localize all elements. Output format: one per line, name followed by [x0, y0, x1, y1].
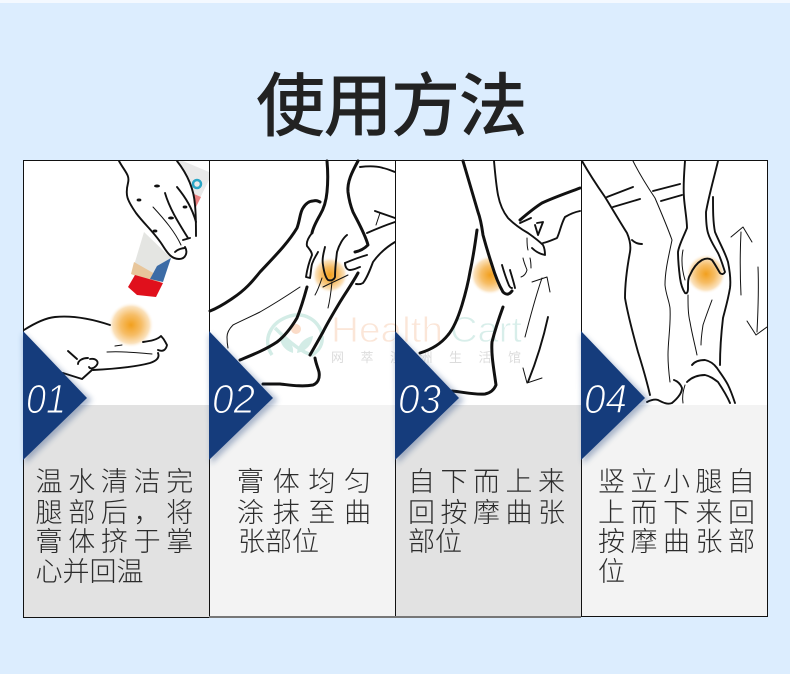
- badge 01: [23, 331, 92, 464]
- step 4 description: [598, 467, 760, 587]
- step 2 bottom edge: [209, 616, 395, 618]
- step 3 bottom edge: [395, 616, 581, 618]
- step 4 text background: [581, 405, 767, 617]
- badge 03: 03: [398, 376, 441, 422]
- step 1 description: [36, 467, 199, 587]
- step 4 description: 位: [598, 557, 625, 587]
- step 2 frame: [210, 160, 396, 616]
- watermark logo: [268, 315, 322, 355]
- badge 02: [209, 331, 278, 464]
- step 4 description: 按摩曲张部: [598, 527, 760, 557]
- step 2 description: 涂抹至曲: [237, 498, 380, 528]
- step 1 description: 温水清洁完: [36, 467, 199, 497]
- step 1 text background: [23, 405, 209, 618]
- panel: step 4: [581, 160, 768, 617]
- panel: step 2: [209, 160, 396, 618]
- step 4 illustration: standing calf massage: [582, 161, 767, 404]
- step 2 text background: [209, 405, 395, 617]
- panel: step 3: [395, 160, 582, 618]
- step 1 frame: [24, 160, 210, 618]
- step 4 description: 上而下来回: [598, 498, 760, 528]
- step 2 description: 膏体均匀: [237, 467, 380, 497]
- badge 04: 04: [584, 376, 627, 422]
- step 1 description: 膏体挤于掌: [36, 527, 199, 557]
- step 4 description: 竖立小腿自: [598, 467, 760, 497]
- step 3 description: 部位: [408, 527, 462, 557]
- watermark: Health Cart: Cart: [450, 309, 522, 350]
- step 4 frame: [582, 160, 768, 616]
- badge 02: 02: [212, 376, 255, 422]
- step 2 illustration: hand on leg: [210, 161, 395, 386]
- step 1 description: 心并回温: [36, 557, 144, 587]
- step 3 text background: [395, 405, 581, 617]
- watermark: Health Cart: [268, 309, 538, 365]
- step 3 description: 自下而上来: [408, 467, 570, 497]
- watermark chinese name: 网萃澳洲生活馆: [331, 350, 538, 365]
- step 3 illustration: massaging upward: [420, 161, 580, 394]
- badge 03: [395, 331, 464, 464]
- step 2 description: [237, 467, 380, 557]
- step 1 description: 腿部后，将: [36, 498, 199, 528]
- panel: step 1: [23, 160, 210, 618]
- watermark name: Health: [331, 309, 443, 350]
- step 3 description: [408, 467, 570, 557]
- badge 01: 01: [26, 376, 66, 422]
- step 3 frame: [396, 160, 582, 616]
- step 2 description: 张部位: [238, 527, 319, 557]
- step 1 illustration: tube and hands: [24, 161, 209, 379]
- title: 使用方法: [256, 68, 526, 145]
- step 3 description: 回按摩曲张: [408, 498, 570, 528]
- badge 04: [581, 331, 650, 464]
